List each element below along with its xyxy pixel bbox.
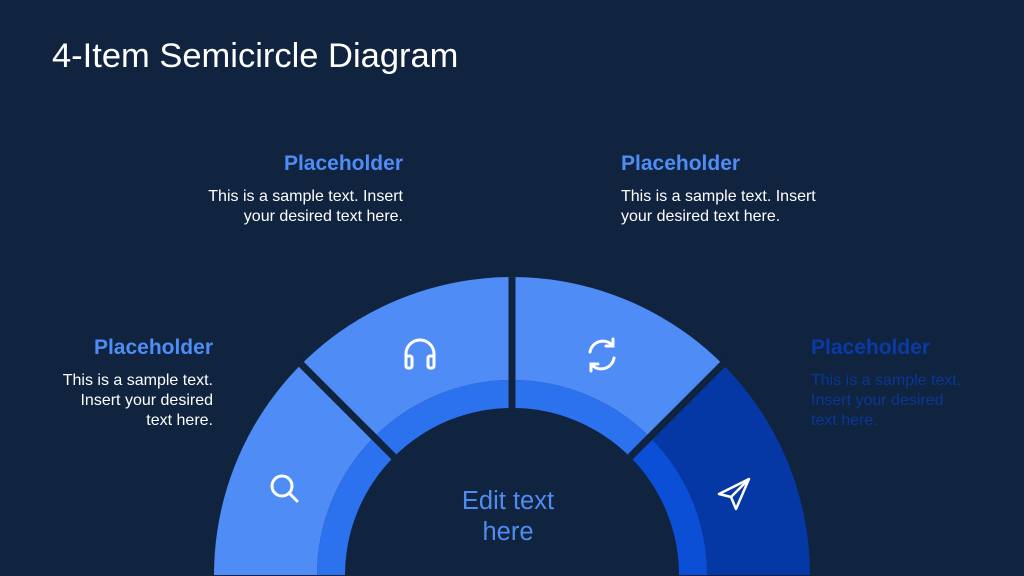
center text: Edit text bbox=[462, 487, 554, 515]
text block: right bbox=[811, 336, 961, 429]
text block: top-right: your desired text here. bbox=[621, 208, 780, 225]
icon: headphones bbox=[406, 340, 434, 368]
text block: left bbox=[63, 336, 213, 429]
text block: left: text here. bbox=[146, 412, 213, 429]
text block: left: Placeholder bbox=[94, 336, 213, 359]
icon: search bbox=[272, 476, 297, 501]
text block: top-left: Placeholder bbox=[284, 152, 403, 175]
semicircle diagram: here bbox=[482, 518, 534, 546]
text block: top-right bbox=[621, 152, 816, 225]
text block: right: This is a sample text. bbox=[811, 372, 961, 389]
text block: top-left: This is a sample text. Insert bbox=[208, 188, 403, 205]
text block: left: Insert your desired bbox=[80, 392, 213, 409]
title: 4-Item Semicircle Diagram bbox=[52, 37, 458, 75]
text block: top-left bbox=[208, 152, 403, 225]
text block: top-right: This is a sample text. Insert bbox=[621, 188, 816, 205]
text block: right: Insert your desired bbox=[811, 392, 944, 409]
text block: left: This is a sample text. bbox=[63, 372, 213, 389]
icon: send bbox=[719, 479, 749, 509]
text block: right: Placeholder bbox=[811, 336, 930, 359]
text block: top-right: Placeholder bbox=[621, 152, 740, 175]
text block: right: text here. bbox=[811, 412, 878, 429]
icon: refresh bbox=[590, 339, 614, 371]
text block: top-left: your desired text here. bbox=[244, 208, 403, 225]
